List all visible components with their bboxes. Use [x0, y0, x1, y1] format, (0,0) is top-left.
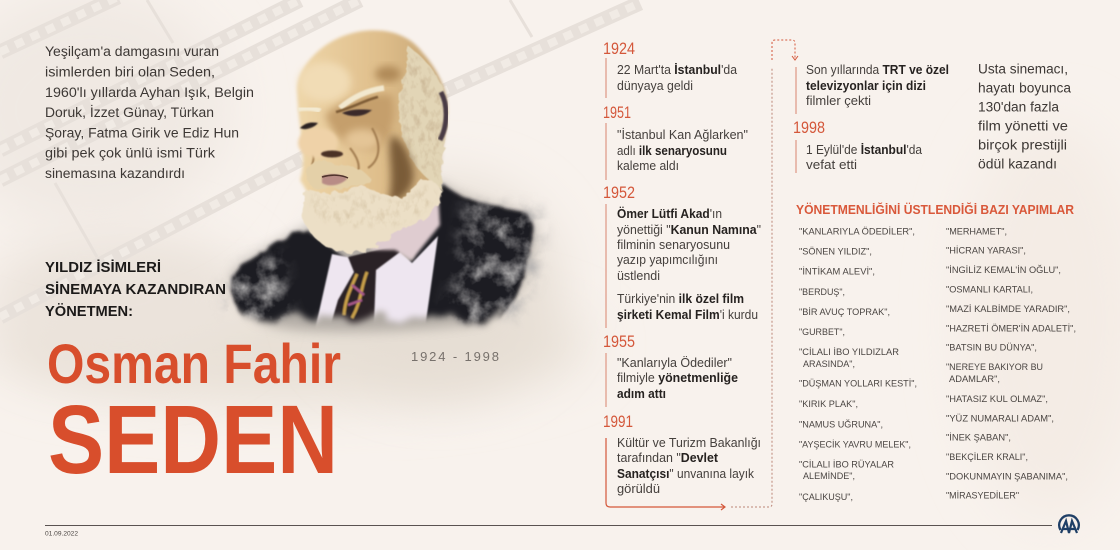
hair dark edge [440, 92, 446, 140]
1998 entry [793, 119, 922, 172]
name title: Osman Fahir [47, 332, 341, 395]
neck [370, 190, 440, 260]
life dates: 1924 - 1998 [411, 349, 499, 364]
career summary text: 130'dan fazla [978, 100, 1059, 114]
film strips [0, 0, 640, 317]
1991 entry: görüldü [617, 482, 660, 496]
filmography left column: "ÇALIKUŞU", [799, 492, 853, 502]
1952 entry: üstlendi [617, 269, 660, 283]
1924 entry: 22 Mart'ta İstanbul'da [617, 62, 737, 77]
1951 entry: adlı ilk senaryosunu [617, 144, 727, 158]
intro text block: sinemasına kazandırdı [45, 166, 185, 181]
filmography right column: "MERHAMET", [946, 226, 1007, 236]
1955 entry: "Kanlarıyla Ödediler" [617, 356, 732, 370]
1952 entry: yönettiği "Kanun Namına" [617, 223, 761, 237]
filmography right column [946, 226, 1076, 500]
timeline [603, 40, 949, 510]
career summary text: film yönetti ve [978, 118, 1068, 134]
footer rule [45, 525, 1052, 526]
arrow to next column [606, 40, 798, 510]
intro text block: Doruk, İzzet Günay, Türkan [45, 105, 214, 120]
beard [303, 180, 441, 253]
filmography right column: "İNEK ŞABAN", [946, 432, 1011, 442]
timeline bars [606, 58, 796, 407]
1955 entry: filmiyle yönetmenliğe [617, 371, 738, 385]
career summary text: hayatı boyunca [978, 80, 1071, 96]
1924 entry: 1924 [603, 40, 635, 58]
filmography left column [799, 226, 917, 502]
subtitle: SİNEMAYA KAZANDIRAN [45, 281, 226, 298]
jacket, shirt and tie [220, 182, 549, 330]
1991 entry [603, 413, 761, 496]
face folds [304, 128, 378, 172]
career summary text: Usta sinemacı, [978, 62, 1068, 76]
career summary text: birçok prestijli [978, 138, 1067, 152]
forehead highlight [299, 62, 351, 102]
filmography left column: ARASINDA", [803, 359, 855, 369]
filmography left column: "SÖNEN YILDIZ", [799, 246, 872, 256]
filmography left column: "CİLALI İBO RÜYALAR [799, 460, 895, 470]
cheek highlight [344, 129, 380, 151]
filmography left column: "CİLALI İBO YILDIZLAR [799, 347, 900, 357]
filmography right column: "NEREYE BAKIYOR BU [946, 362, 1043, 372]
1991 entry: tarafından "Devlet [617, 451, 719, 465]
filmography left column: "GURBET", [799, 327, 845, 337]
filmography right column: "HATASIZ KUL OLMAZ", [946, 394, 1048, 404]
recent years entry: filmler çekti [806, 94, 871, 108]
intro text block: Şoray, Fatma Girik ve Ediz Hun [45, 126, 239, 140]
nose [298, 128, 338, 158]
1924 entry: dünyaya geldi [617, 79, 693, 93]
date: 01.09.2022 [45, 530, 78, 538]
filmography left column: "BERDUŞ", [799, 287, 845, 297]
1998 entry: 1 Eylül'de İstanbul'da [806, 142, 922, 157]
head [297, 30, 447, 230]
subtitle: YILDIZ İSİMLERİ [45, 259, 161, 276]
temple shading [375, 66, 401, 82]
mustache [306, 161, 372, 189]
filmography right column: "İNGİLİZ KEMAL'İN OĞLU", [946, 265, 1061, 275]
eye socket shading [325, 94, 394, 150]
mouth [322, 174, 347, 185]
1952 entry: şirketi Kemal Film'i kurdu [617, 308, 758, 322]
cheek shadow [388, 135, 413, 205]
1998 entry: vefat etti [806, 158, 857, 172]
beard texture [312, 186, 436, 228]
1955 entry: 1955 [603, 333, 635, 351]
filmography right column: "HİCRAN YARASI", [946, 246, 1026, 256]
career summary text [978, 62, 1071, 172]
1951 entry: "İstanbul Kan Ağlarken" [617, 128, 748, 142]
filmography right column: "OSMANLI KARTALI, [946, 284, 1033, 294]
1952 entry: yazıp yapımcılığını [617, 253, 718, 267]
career summary text: ödül kazandı [978, 156, 1057, 172]
filmography right column: "DOKUNMAYIN ŞABANIMA", [946, 472, 1068, 482]
filmography left column: "KIRIK PLAK", [799, 399, 858, 409]
name title [47, 332, 341, 494]
filmography left column: "NAMUS UĞRUNA", [799, 420, 883, 430]
eyes [300, 123, 318, 129]
1998 entry: 1998 [793, 119, 825, 137]
brows [298, 108, 320, 111]
filmography left column: ALEMİNDE", [803, 471, 855, 481]
1952 entry: Ömer Lütfi Akad'ın [617, 206, 722, 221]
1924 entry [603, 40, 737, 93]
jacket [228, 182, 536, 329]
1952 entry [603, 184, 761, 322]
1951 entry [603, 104, 748, 173]
1952 entry: 1952 [603, 184, 635, 202]
jacket smoke texture [220, 200, 549, 328]
filmography right column: "BEKÇİLER KRALI", [946, 452, 1028, 462]
1951 entry: 1951 [603, 104, 631, 122]
recent years entry: Son yıllarında TRT ve özel [806, 63, 949, 77]
name title: SEDEN [48, 385, 338, 494]
filmography right column: "HAZRETİ ÖMER'İN ADALETİ", [946, 324, 1076, 334]
subtitle: YÖNETMEN: [45, 303, 133, 320]
filmography left column: "BİR AVUÇ TOPRAK", [799, 307, 890, 317]
1952 entry: filminin senaryosunu [617, 238, 730, 252]
portrait: Osman Fahir Seden [222, 30, 543, 355]
tie [332, 248, 400, 328]
1991 entry: 1991 [603, 413, 633, 431]
1991 entry: Kültür ve Turizm Bakanlığı [617, 436, 761, 450]
1991 entry: Sanatçısı" unvanına layık [617, 467, 755, 481]
nostril [321, 150, 343, 158]
shirt [316, 236, 439, 328]
filmography right column: "BATSIN BU DÜNYA", [946, 342, 1037, 352]
filmography right column: ADAMLAR", [949, 374, 1000, 384]
filmography left column: "İNTİKAM ALEVİ", [799, 266, 875, 276]
1951 entry: kaleme aldı [617, 159, 679, 173]
intro text block: 1960'lı yıllarda Ayhan Işık, Belgin [45, 85, 254, 100]
jacket smoke halo [232, 183, 535, 331]
filmography right column: "MİRASYEDİLER" [946, 490, 1019, 500]
filmography right column: "YÜZ NUMARALI ADAM", [946, 414, 1054, 424]
intro text block: isimlerden biri olan Seden, [45, 64, 215, 80]
1955 entry: adım attı [617, 387, 666, 401]
mouth line [322, 175, 348, 178]
filmography right column: "MAZİ KALBİMDE YARADIR", [946, 304, 1070, 314]
recent years entry [806, 63, 949, 108]
1952 entry: Türkiye'nin ilk özel film [617, 292, 744, 306]
intro text block: Yeşilçam'a damgasını vuran [45, 44, 219, 59]
subtitle [45, 259, 226, 320]
intro text block: gibi pek çok ünlü ismi Türk [45, 146, 215, 160]
filmography left column: "KANLARIYLA ÖDEDİLER", [799, 226, 915, 236]
recent years entry: televizyonlar için dizi [806, 79, 926, 93]
filmography left column: "AYŞECİK YAVRU MELEK", [799, 440, 911, 450]
1955 entry [603, 333, 738, 401]
intro text block [45, 44, 254, 181]
hair [399, 46, 447, 190]
icon: news agency logo [1059, 515, 1079, 533]
hair texture [401, 50, 445, 186]
filmography heading: YÖNETMENLİĞİNİ ÜSTLENDİĞİ BAZI YAPIMLAR [796, 202, 1075, 217]
filmography left column: "DÜŞMAN YOLLARI KESTİ", [799, 378, 917, 388]
